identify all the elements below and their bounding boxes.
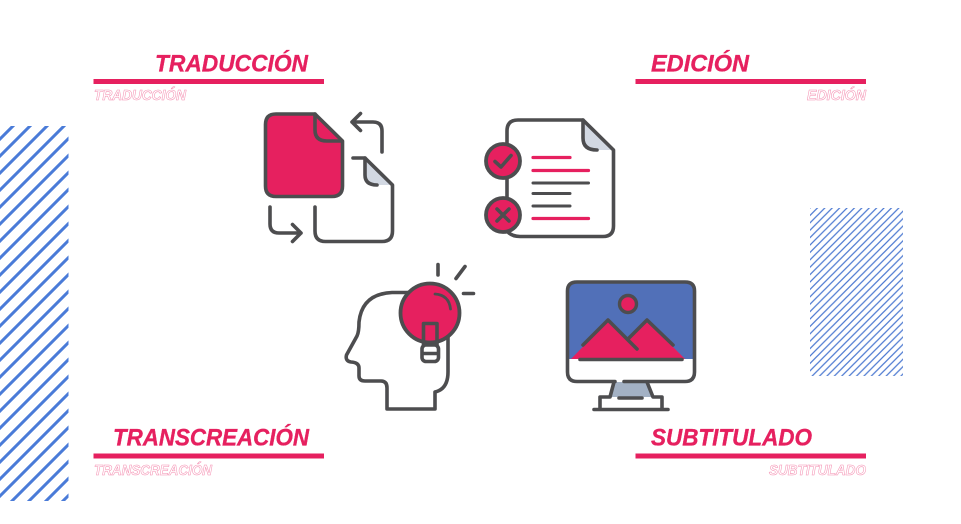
heading: edición: EDICIÓN [651,50,750,78]
icon: head with light bulb [346,264,474,409]
right striped pattern panel [810,208,903,376]
heading: subtitulado [636,424,867,479]
heading: transcreación: TRANSCREACIÓN [113,424,310,452]
icon: monitor with image [568,282,694,410]
left striped pattern panel [0,126,68,501]
heading: subtitulado: SUBTITULADO [769,463,867,479]
heading: subtitulado: SUBTITULADO [651,424,812,452]
heading: traducción [94,50,324,104]
heading: edición: EDICIÓN [807,86,867,104]
icon: document review checklist [486,120,614,236]
heading: transcreación: TRANSCREACIÓN [94,461,212,479]
heading: edición [636,50,867,104]
icon: translation documents with arrows [266,114,392,242]
heading: traducción: TRADUCCIÓN [155,50,309,78]
heading: traducción: TRADUCCIÓN [94,86,186,104]
heading: transcreación [94,424,324,479]
